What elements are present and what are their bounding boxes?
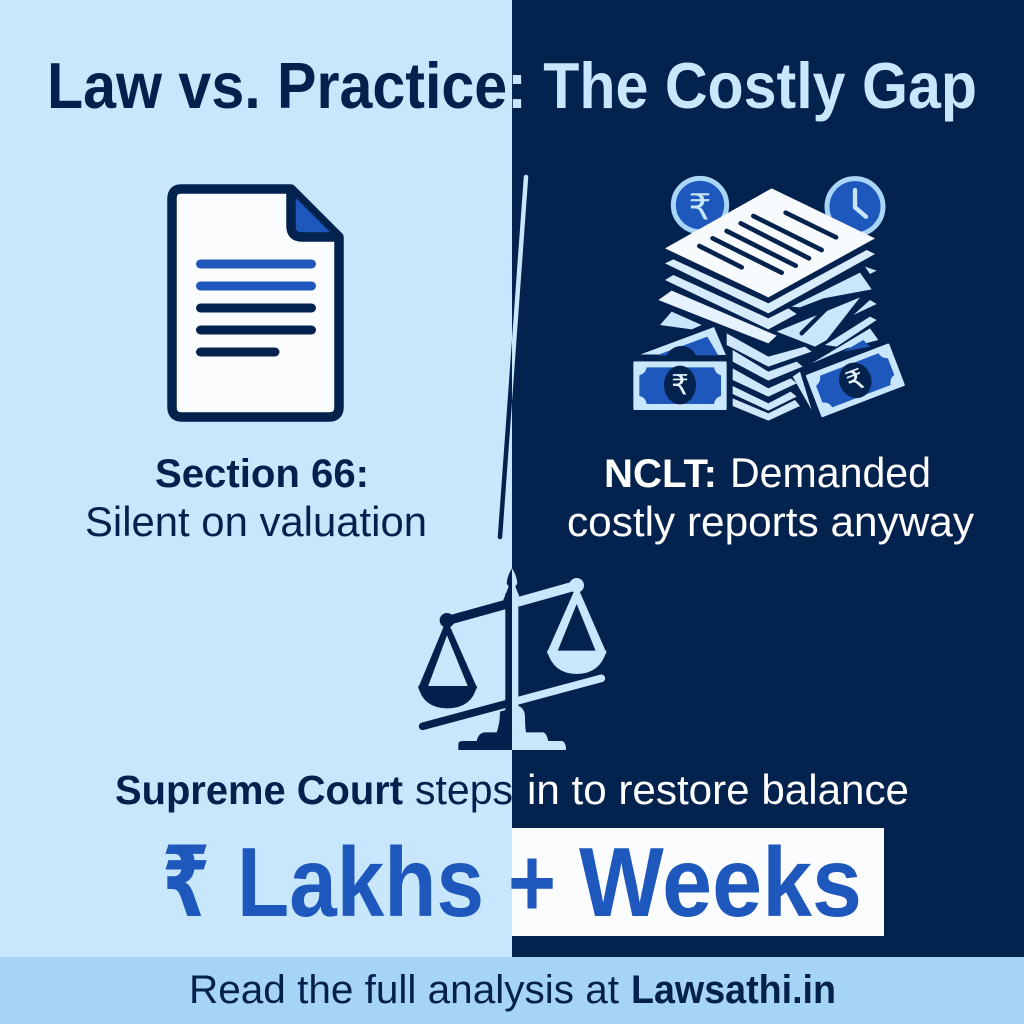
text: NCLT: Demanded xyxy=(730,449,931,496)
bill front left: ₹ xyxy=(671,369,689,402)
text: NCLT: NCLT: xyxy=(604,452,717,496)
panel: right background xyxy=(512,0,1024,957)
bill front right: ₹ xyxy=(841,362,870,399)
bill sliver right xyxy=(793,372,812,410)
beam xyxy=(447,581,578,625)
icon: clock xyxy=(827,179,883,235)
scale base and pillar xyxy=(458,593,566,750)
text: supreme court: Supreme Court xyxy=(115,767,403,813)
left paper layers xyxy=(658,250,875,343)
right loose sheets xyxy=(777,267,878,363)
finial xyxy=(503,568,521,613)
icon: document xyxy=(172,189,339,417)
footer band xyxy=(0,957,1024,1024)
panel: left background xyxy=(0,0,512,957)
white highlight box xyxy=(512,828,884,936)
left pan xyxy=(418,623,477,708)
text: supreme court: steps xyxy=(415,766,513,813)
headline: lakhs plus weeks xyxy=(162,826,862,940)
text: supreme court: in to restore balance xyxy=(527,766,909,813)
text: NCLT xyxy=(567,449,974,545)
footer text xyxy=(189,968,836,1012)
headline: lakhs plus weeks: ₹ xyxy=(162,826,210,940)
icon: rupee coin xyxy=(673,178,727,232)
text: supreme court xyxy=(115,766,909,813)
footer text: Lawsathi.in xyxy=(631,968,836,1012)
icon: balance scale xyxy=(418,568,607,750)
right pan xyxy=(547,590,607,674)
center chevrons xyxy=(727,333,812,421)
icon: rupee coin: ₹ xyxy=(689,187,711,228)
top sheet xyxy=(665,188,875,297)
back bill left xyxy=(640,327,726,356)
text: section 66: Silent on valuation xyxy=(85,498,427,545)
tilted bar xyxy=(423,678,601,726)
divider line xyxy=(500,177,526,537)
icon: paper stack with money and clock xyxy=(632,178,906,421)
text: section 66 xyxy=(85,452,427,545)
text: section 66: Section 66: xyxy=(155,452,369,496)
bill front left xyxy=(633,361,727,411)
footer text: Read the full analysis at xyxy=(189,968,619,1012)
bill front right xyxy=(805,342,906,418)
headline: lakhs plus weeks: + xyxy=(508,827,556,937)
headline: lakhs plus weeks: Lakhs xyxy=(237,827,484,937)
headline: lakhs plus weeks: Weeks xyxy=(579,827,862,937)
text: NCLT: costly reports anyway xyxy=(567,498,974,545)
